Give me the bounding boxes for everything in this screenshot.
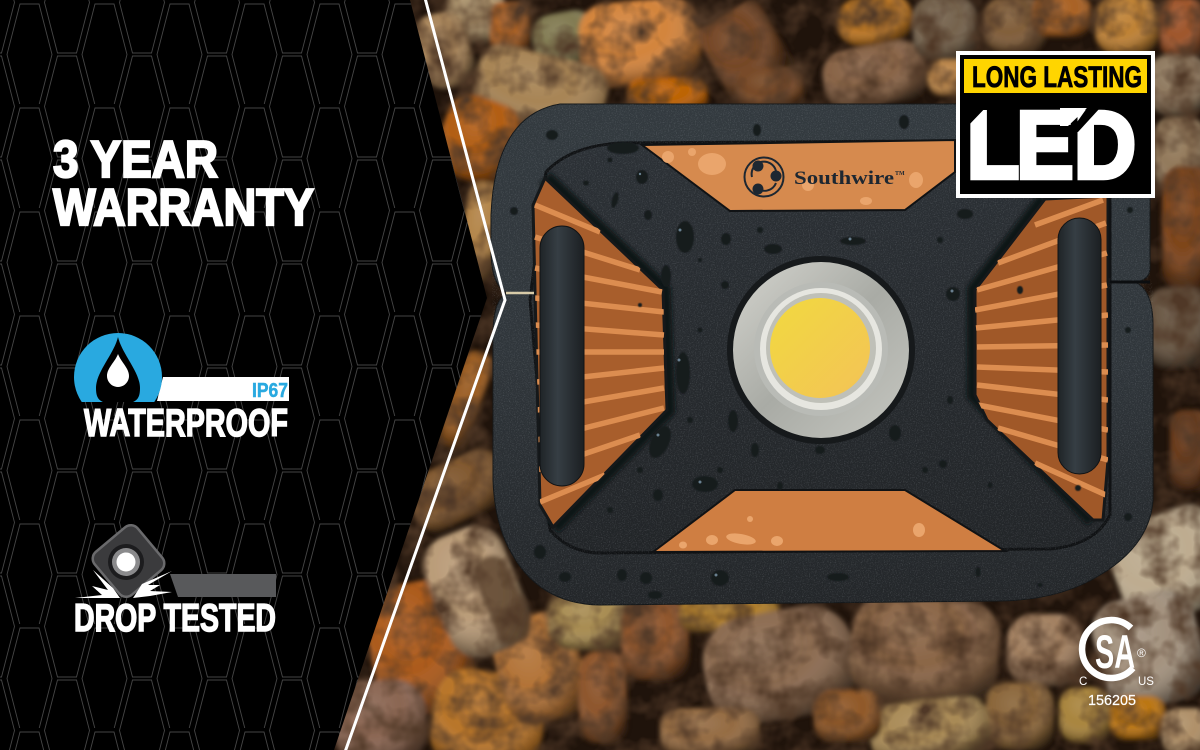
mottled rock surface shading: [330, 0, 1200, 750]
heading: 3 year warranty: WARRANTY: [53, 179, 314, 237]
CSA certification mark: [1079, 620, 1154, 709]
right cooling fins: [975, 196, 1108, 520]
drop tested label: DROP TESTED: [74, 597, 276, 640]
yellow banner: [964, 59, 1147, 93]
extended E top arm: [1060, 108, 1087, 126]
bottom orange panel: [653, 490, 1005, 552]
CSA ring: [1082, 620, 1133, 678]
recessed shadows around fins: [545, 178, 1093, 527]
icon: water drop on blue dome: [74, 333, 162, 402]
IP67 rating: IP67: [252, 380, 288, 402]
rubber grain texture: [490, 100, 1155, 610]
right bumper divider: [1108, 190, 1112, 510]
trademark sign: TM: [895, 171, 905, 177]
angled white divider line: [345, 0, 505, 750]
COB LED emitter: [770, 298, 870, 398]
impact sparks: [75, 570, 172, 598]
C US text: C: [1079, 676, 1087, 688]
S A letters: SA: [1095, 625, 1135, 678]
certificate number: 156205: [1088, 693, 1136, 709]
photo background: wet river rocks: [330, 0, 1200, 750]
US label: US: [1138, 676, 1154, 688]
LED text: LED: [967, 92, 1136, 199]
rubber bumper body: [491, 104, 1153, 605]
Southwire wordmark: Southwire: [794, 169, 894, 189]
registered mark: ®: [1137, 646, 1146, 660]
right bumper gap: [1110, 280, 1150, 284]
Southwire logo: [744, 158, 784, 196]
product: waterproof LED work light: [490, 100, 1155, 610]
long lasting LED badge: [956, 51, 1155, 199]
icon: tilted work light hitting the ground: [89, 522, 168, 600]
left handle: [540, 226, 584, 486]
right handle: [1058, 218, 1101, 474]
top orange panel: [642, 140, 955, 211]
drop tested badge: [74, 522, 276, 640]
heading: 3 year warranty: 3 YEAR: [53, 131, 218, 189]
droplet highlights: [639, 173, 954, 577]
long lasting text: LONG LASTING: [972, 61, 1142, 94]
heading: 3 year warranty: [53, 131, 314, 237]
water droplets on rubber: [510, 115, 1133, 599]
waterproof badge: [74, 333, 289, 445]
white IP67 bar: [157, 377, 289, 401]
water droplets on orange panels: [662, 148, 925, 548]
hinge cord at the left notch: [506, 292, 534, 294]
left cooling fins: [533, 178, 667, 527]
LED slanted cuts: [966, 102, 1100, 132]
lens assembly: [727, 256, 915, 444]
X-shaped centre frame: [530, 140, 1110, 553]
grey bar: [170, 574, 276, 597]
left black panel with hexagon pattern: [0, 0, 487, 750]
waterproof label: WATERPROOF: [84, 402, 288, 445]
